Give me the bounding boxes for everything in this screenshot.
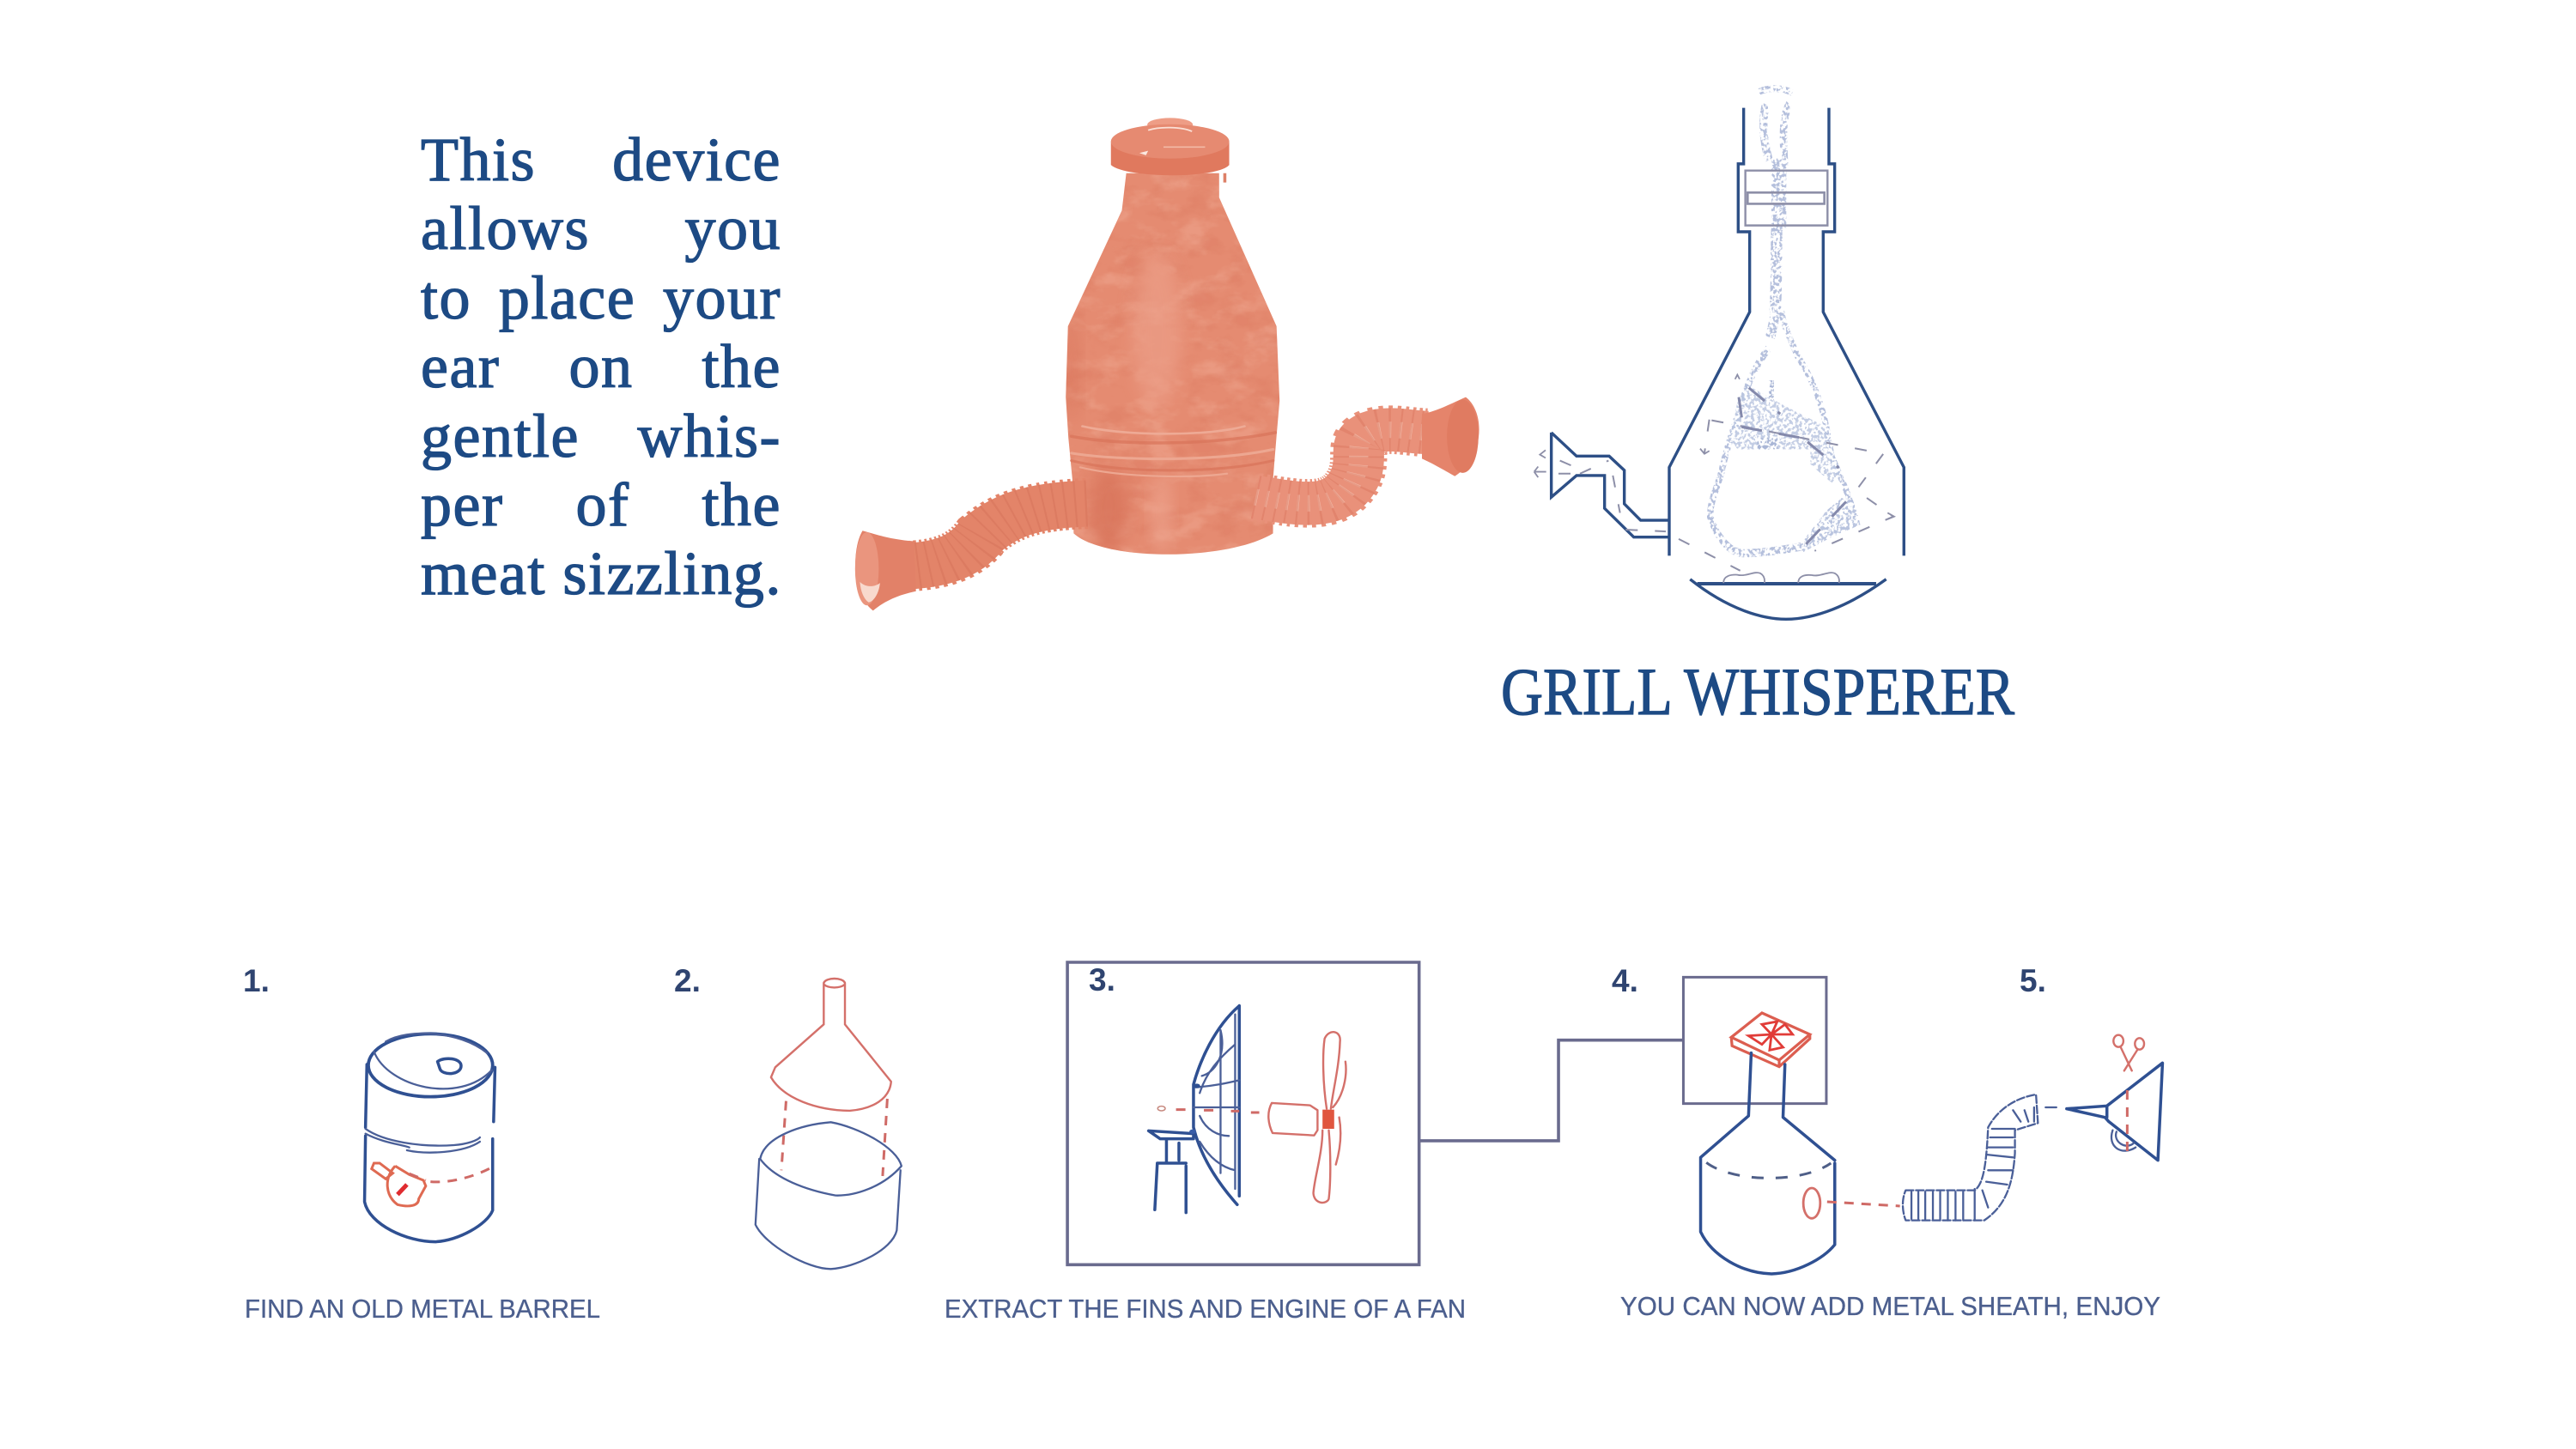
diagram: flask cross-section xyxy=(1534,88,1904,619)
title: GRILL WHISPERER xyxy=(1501,654,2014,729)
sound particles xyxy=(1710,88,1857,553)
left tube xyxy=(898,504,1087,567)
sound path dashes xyxy=(1558,375,1894,571)
step 1: metal barrel sketch xyxy=(365,1034,495,1242)
step 4-5 caption: YOU CAN NOW ADD METAL SHEATH, ENJOY xyxy=(1620,1291,2160,1321)
bottle cap xyxy=(1111,118,1230,183)
step 4 number: 4. xyxy=(1612,963,1638,998)
step 5: hose, ear funnel and scissors xyxy=(1903,1035,2162,1221)
right flare xyxy=(1422,397,1479,476)
grill pan xyxy=(1690,573,1886,619)
step 3 number: 3. xyxy=(1089,962,1115,997)
step 3 caption: EXTRACT THE FINS AND ENGINE OF A FAN xyxy=(945,1294,1466,1324)
intro text block xyxy=(421,125,782,608)
intro text block: meat sizzling. xyxy=(421,539,782,608)
intro text block: gentle whis- xyxy=(421,402,781,470)
left flare xyxy=(855,530,916,610)
step 3 panel xyxy=(1067,962,1419,1264)
ear funnel xyxy=(2067,1063,2162,1161)
connector from step 3 to step 4 xyxy=(1419,1040,1683,1141)
step 1 caption: FIND AN OLD METAL BARREL xyxy=(245,1294,600,1324)
fan cage and stand xyxy=(1149,1006,1239,1213)
fan housing xyxy=(1746,171,1827,226)
bottle body xyxy=(1066,173,1279,555)
step 5 number: 5. xyxy=(2020,963,2046,998)
valve, red xyxy=(372,1163,492,1206)
ear horn xyxy=(1534,433,1668,537)
illustration: orange bottle device with two ear tubes xyxy=(855,118,1479,610)
flexible hose xyxy=(1903,1094,2038,1221)
step 4: assembled barrel with fan inset xyxy=(1683,977,1900,1274)
bottle ridges xyxy=(1072,427,1275,476)
step 1 number: 1. xyxy=(243,963,270,998)
intro text block: This device xyxy=(421,125,781,194)
intro text block: ear on the xyxy=(421,332,781,401)
step 2 number: 2. xyxy=(674,963,701,998)
right tube xyxy=(1255,430,1429,503)
intro text block: allows you xyxy=(421,194,781,263)
intro text block: to place your xyxy=(421,264,781,332)
fan motor and blades xyxy=(1157,1032,1346,1203)
intro text block: per of the xyxy=(421,470,781,539)
flask walls xyxy=(1669,108,1904,555)
scissors xyxy=(2113,1035,2144,1070)
step 2: funnel over barrel sketch xyxy=(756,979,902,1269)
red fan square xyxy=(1731,1013,1810,1067)
